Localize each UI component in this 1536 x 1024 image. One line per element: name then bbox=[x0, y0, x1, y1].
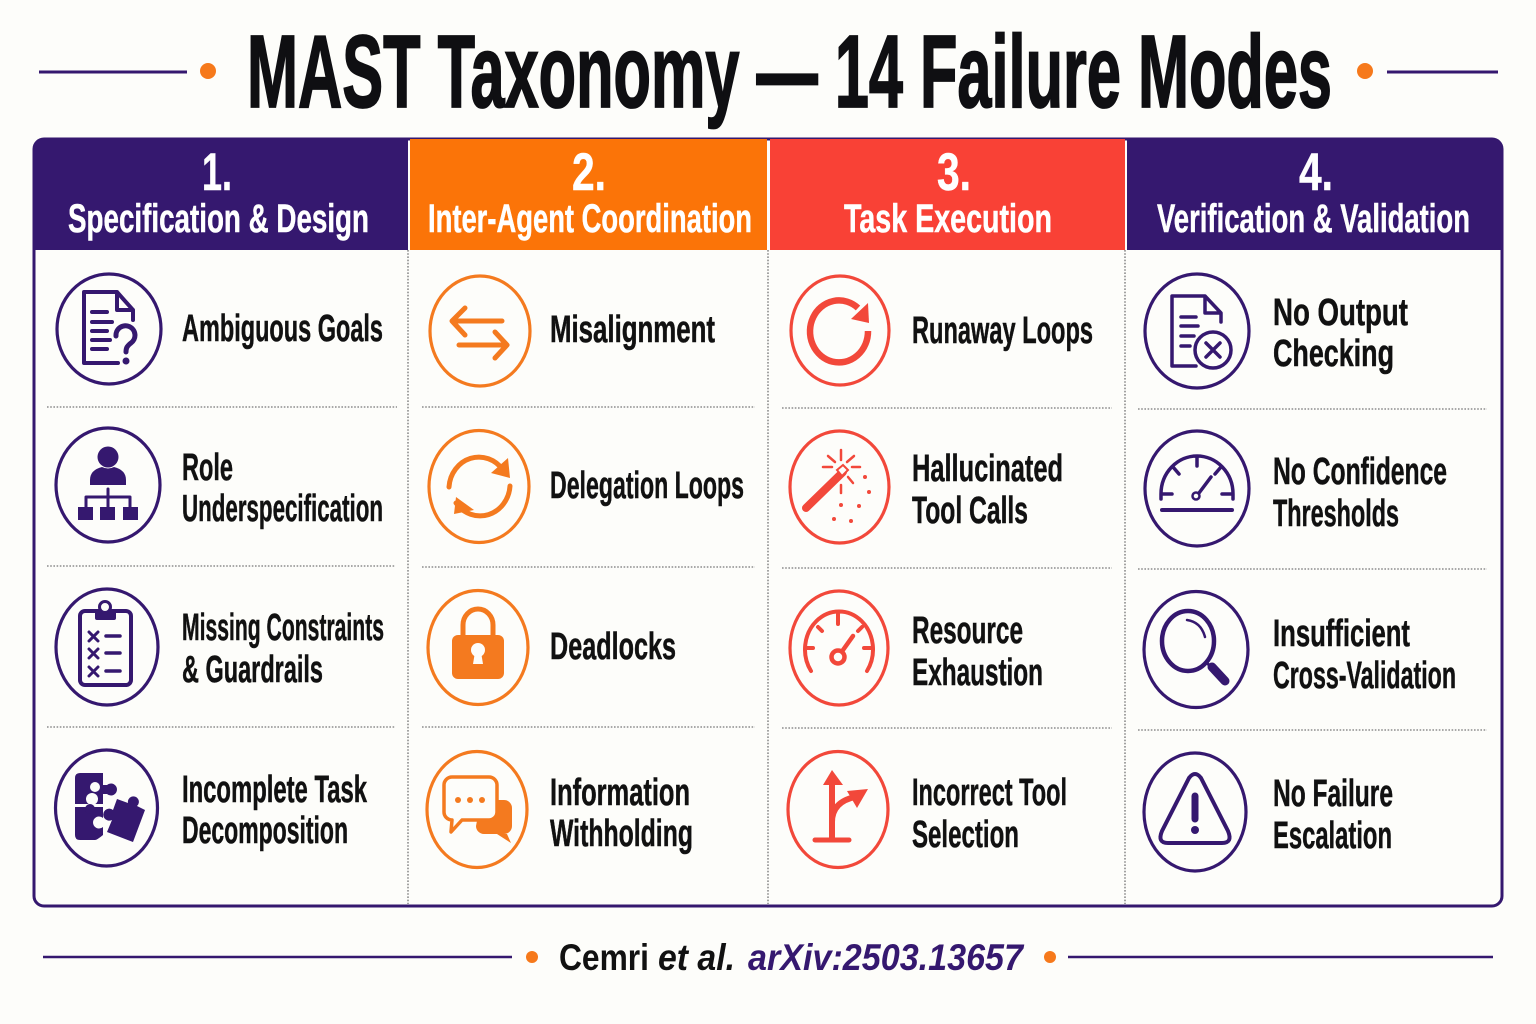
item: Incomplete Task Decomposition bbox=[56, 750, 368, 866]
header: 3. Task Execution bbox=[770, 139, 1125, 250]
item: Insufficient Cross-Validation bbox=[1144, 592, 1456, 708]
header: 1. Specification & Design: 1. bbox=[202, 143, 232, 202]
item: Information Withholding: Information bbox=[550, 772, 690, 814]
item: No Confidence Thresholds: No Confidence bbox=[1273, 451, 1447, 493]
item: Hallucinated Tool Calls: Tool Calls bbox=[912, 490, 1028, 532]
item: Ambiguous Goals: Ambiguous Goals bbox=[182, 308, 383, 350]
item: Deadlocks: Deadlocks bbox=[550, 626, 676, 668]
item: No Output Checking bbox=[1145, 274, 1408, 388]
item: Incorrect Tool Selection bbox=[788, 752, 1067, 868]
item: Information Withholding: Withholding bbox=[550, 813, 693, 855]
header: 2. Inter-Agent Coordination: Inter-Agent Coordination bbox=[428, 197, 752, 241]
item: Misalignment bbox=[430, 276, 715, 386]
column 3 bbox=[788, 276, 1093, 868]
header: 1. Specification & Design: Specification & Design bbox=[68, 197, 369, 241]
item: Runaway Loops bbox=[791, 276, 1093, 385]
item: Runaway Loops: Runaway Loops bbox=[912, 310, 1093, 352]
item: No Failure Escalation: No Failure bbox=[1273, 773, 1393, 815]
item: Role Underspecification: Role bbox=[182, 447, 233, 489]
column 4 bbox=[1144, 274, 1456, 871]
item: Misalignment: Misalignment bbox=[550, 309, 715, 351]
item: Delegation Loops bbox=[429, 430, 744, 542]
header: 2. Inter-Agent Coordination bbox=[410, 139, 767, 250]
footer citation: Cemri bbox=[559, 937, 649, 978]
header: 4. Verification & Validation: 4. bbox=[1299, 143, 1333, 202]
item: No Output Checking: No Output bbox=[1273, 292, 1408, 334]
footer citation: arXiv:2503.13657 bbox=[748, 937, 1025, 978]
footer citation: et al. bbox=[658, 937, 735, 978]
item: Role Underspecification: Underspecification bbox=[182, 488, 383, 530]
item: Resource Exhaustion: Resource bbox=[912, 610, 1023, 652]
item: Ambiguous Goals bbox=[57, 274, 383, 384]
item: No Confidence Thresholds bbox=[1145, 431, 1447, 546]
item: Resource Exhaustion: Exhaustion bbox=[912, 652, 1043, 694]
column 2 bbox=[427, 276, 744, 868]
header: 3. Task Execution: Task Execution bbox=[844, 197, 1052, 241]
item: Incorrect Tool Selection: Incorrect Tool bbox=[912, 772, 1067, 814]
panel: table frame bbox=[34, 139, 1502, 906]
item: No Failure Escalation bbox=[1144, 753, 1393, 871]
header: 1. Specification & Design bbox=[34, 139, 408, 250]
column 1 bbox=[56, 274, 384, 866]
item: Missing Constraints & Guardrails: Missing Constraints bbox=[182, 607, 384, 649]
item: Hallucinated Tool Calls bbox=[790, 431, 1063, 543]
item: Incomplete Task Decomposition: Decomposition bbox=[182, 810, 348, 852]
item: Insufficient Cross-Validation: Insufficient bbox=[1273, 613, 1410, 655]
header: 4. Verification & Validation bbox=[1127, 139, 1503, 250]
item: Missing Constraints & Guardrails: & Guardrails bbox=[182, 649, 323, 691]
item: No Confidence Thresholds: Thresholds bbox=[1273, 493, 1399, 535]
item: Incorrect Tool Selection: Selection bbox=[912, 814, 1019, 856]
item: Incomplete Task Decomposition: Incomplete Task bbox=[182, 769, 368, 811]
item: Missing Constraints & Guardrails bbox=[56, 589, 384, 705]
item: No Failure Escalation: Escalation bbox=[1273, 815, 1392, 857]
item: Role Underspecification bbox=[56, 428, 383, 542]
footer citation bbox=[43, 937, 1493, 978]
header: 2. Inter-Agent Coordination: 2. bbox=[572, 143, 606, 202]
item: Resource Exhaustion bbox=[790, 591, 1043, 705]
item: Information Withholding bbox=[427, 752, 693, 868]
header: 3. Task Execution: 3. bbox=[937, 143, 971, 202]
item: Hallucinated Tool Calls: Hallucinated bbox=[912, 448, 1063, 490]
item: Deadlocks bbox=[428, 590, 676, 704]
item: No Output Checking: Checking bbox=[1273, 333, 1394, 375]
item: Delegation Loops: Delegation Loops bbox=[550, 465, 744, 507]
